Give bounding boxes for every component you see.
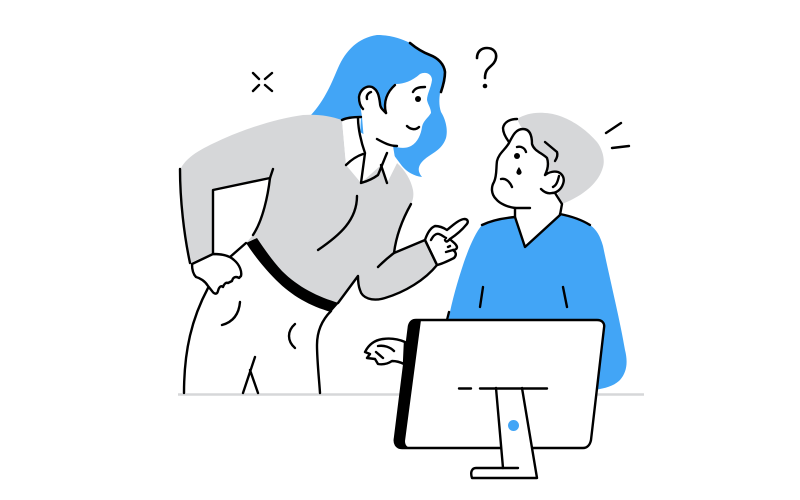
woman sweater xyxy=(180,115,437,303)
woman sweater lines xyxy=(180,169,437,303)
floor line xyxy=(178,393,644,396)
man tear xyxy=(516,167,522,175)
woman collar xyxy=(342,117,397,183)
man hair xyxy=(517,113,604,204)
monitor stand lines xyxy=(459,388,547,478)
icon: question mark xyxy=(477,48,496,88)
woman hair xyxy=(311,35,447,177)
monitor body xyxy=(395,320,604,448)
icon: surprise marks xyxy=(606,123,629,148)
woman head lines xyxy=(359,43,445,146)
man left hand xyxy=(365,339,405,364)
monitor dark edge xyxy=(395,320,421,448)
woman collar lines xyxy=(342,117,387,183)
man sweater xyxy=(448,215,627,390)
monitor stand xyxy=(471,388,537,478)
woman trousers lines xyxy=(184,243,331,393)
woman face and neck xyxy=(359,73,432,183)
woman belt xyxy=(246,238,339,312)
man face xyxy=(492,129,564,247)
man eye xyxy=(514,153,520,159)
woman left hand on hip xyxy=(192,254,241,294)
woman eye xyxy=(415,96,421,102)
man head lines xyxy=(447,119,590,320)
icon: cross sparkle xyxy=(253,73,272,91)
computer monitor xyxy=(395,320,604,478)
monitor power dot xyxy=(508,420,519,431)
woman pointing hand xyxy=(425,219,468,265)
man figure xyxy=(365,113,627,390)
woman figure xyxy=(180,35,468,393)
